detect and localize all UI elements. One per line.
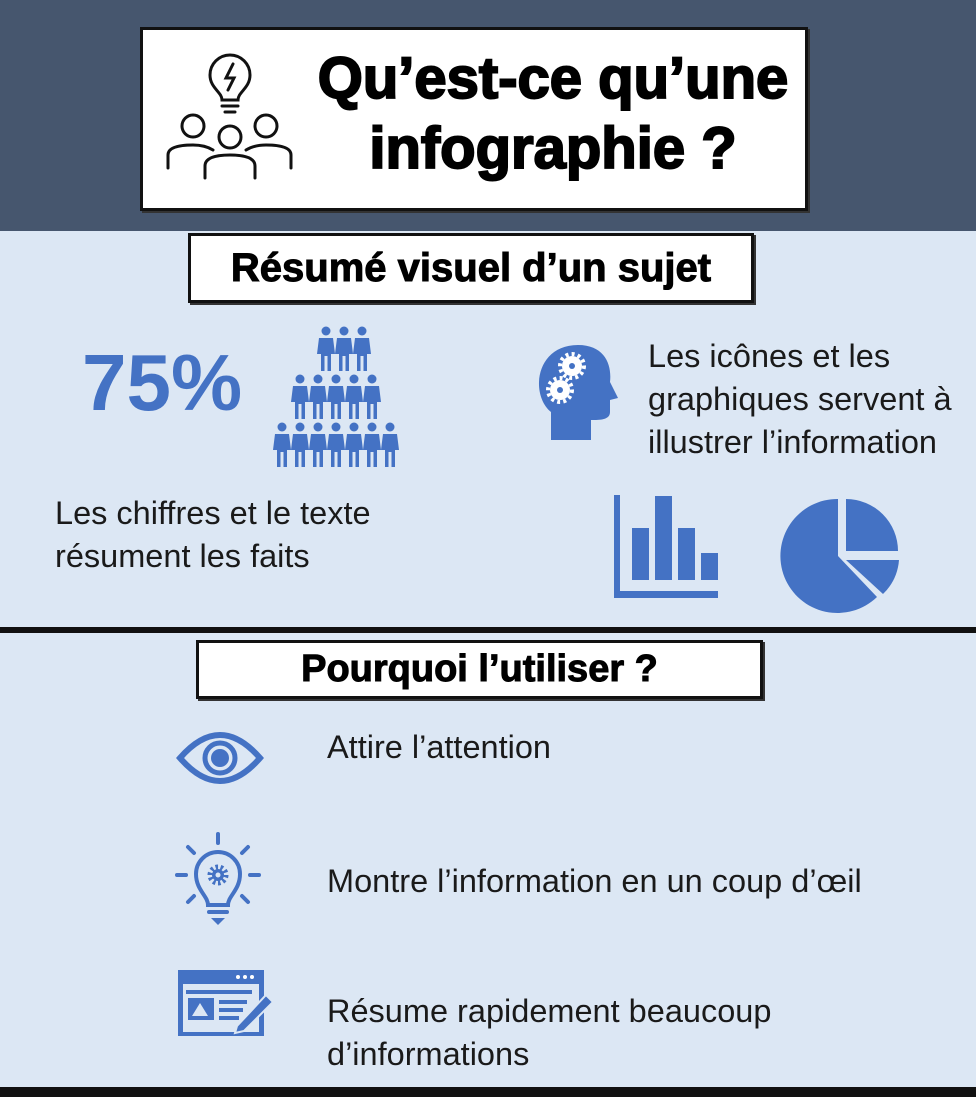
text: chiffres: Les chiffres et le texte bbox=[55, 495, 371, 531]
text: chiffres: résument les faits bbox=[55, 538, 310, 574]
text: icônes bbox=[648, 338, 952, 460]
subtitle box: pourquoi bbox=[196, 640, 763, 699]
text: résume: Résume rapidement beaucoup bbox=[327, 993, 771, 1029]
divider bbox=[0, 627, 976, 633]
text: résume bbox=[327, 993, 771, 1072]
icon: eye bbox=[176, 732, 264, 784]
text: chiffres bbox=[55, 495, 371, 574]
text: résume: d’informations bbox=[327, 1036, 529, 1072]
icon: lightbulb gear bbox=[175, 832, 261, 925]
text: icônes: illustrer l’information bbox=[648, 424, 937, 460]
icon: pie chart bbox=[780, 499, 899, 613]
icon: people pyramid bbox=[273, 326, 399, 467]
subtitle box: pourquoi: Pourquoi l’utiliser ? bbox=[301, 648, 658, 690]
title text bbox=[318, 46, 788, 182]
text: icônes: graphiques servent à bbox=[648, 381, 952, 417]
title text: Qu’est-ce qu’une bbox=[318, 46, 788, 111]
text: icônes: Les icônes et les bbox=[648, 338, 890, 374]
text: attention: Attire l’attention bbox=[327, 729, 551, 765]
header band bbox=[0, 0, 976, 231]
stat: 75%: 75% bbox=[82, 338, 242, 427]
subtitle box: résumé visuel: Résumé visuel d’un sujet bbox=[231, 246, 711, 290]
icon: bar chart bbox=[614, 495, 718, 598]
subtitle box: résumé visuel bbox=[188, 233, 754, 303]
icon: browser with pen bbox=[178, 970, 272, 1036]
icon: lightbulb with people bbox=[166, 54, 292, 180]
title text: infographie ? bbox=[369, 116, 737, 181]
icon: head with gears bbox=[539, 345, 618, 440]
text: coup d'oeil: Montre l’information en un coup d’œil bbox=[327, 863, 862, 899]
bottom border bbox=[0, 1087, 976, 1097]
title box bbox=[140, 27, 808, 211]
